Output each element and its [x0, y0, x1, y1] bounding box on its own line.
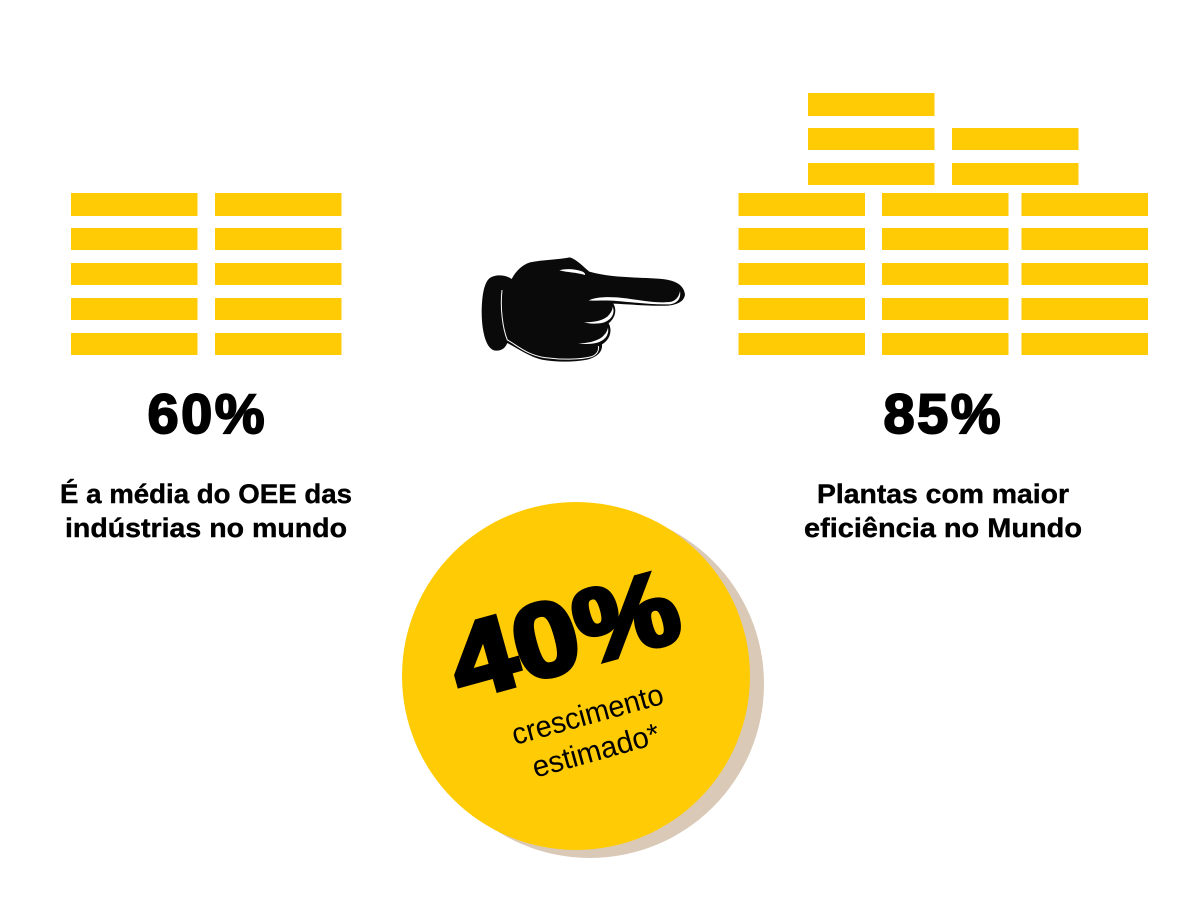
icon: pointing hand	[482, 257, 685, 362]
badge label: crescimento	[508, 678, 667, 752]
badge label: estimado*	[529, 718, 664, 784]
badge value: 40%	[437, 548, 692, 722]
bar block: 60%	[71, 193, 342, 355]
caption: most efficient plants: Plantas com maior	[817, 479, 1070, 509]
caption: OEE average: É a média do OEE das	[60, 478, 352, 509]
caption: most efficient plants: eficiência no Mundo	[804, 513, 1082, 543]
stat: 60%: 60%	[148, 382, 264, 445]
bar block: 85%	[738, 93, 1148, 355]
badge shadow	[416, 510, 764, 858]
badge circle	[402, 502, 750, 850]
badge: 40% estimated growth	[402, 502, 764, 858]
caption: OEE average: indústrias no mundo	[65, 513, 347, 543]
stat: 85%: 85%	[884, 382, 1000, 445]
